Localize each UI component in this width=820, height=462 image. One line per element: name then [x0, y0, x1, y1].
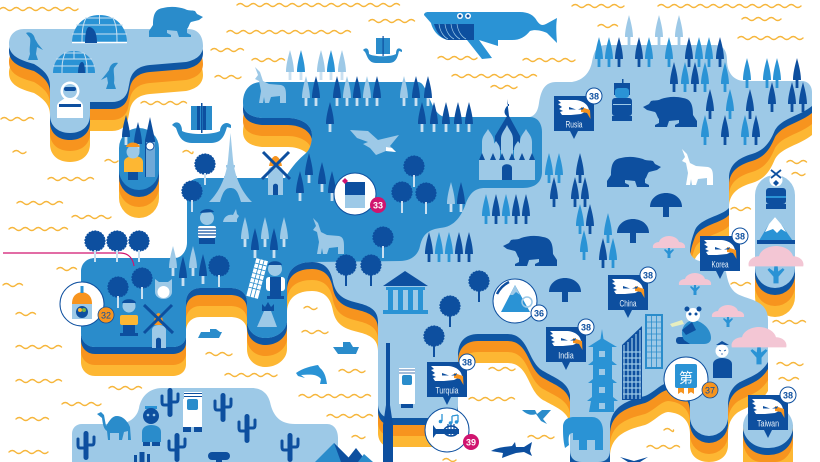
- icon: boat right: [333, 342, 359, 354]
- icon: penguin left: [26, 32, 43, 60]
- icon: japanese man: [766, 170, 786, 209]
- circle icon: stamp 37: 第: [679, 368, 693, 388]
- marker: Korea: [700, 228, 748, 279]
- marker: China: 38: [643, 270, 653, 280]
- forest: europe conifers: [122, 76, 473, 286]
- icon: polar bear: [149, 7, 203, 37]
- icon: rabbit: [223, 209, 239, 222]
- icon: pagoda: [587, 329, 618, 412]
- icon: wolf on europe: [255, 67, 286, 103]
- circle icon: trumpet 39: [425, 408, 479, 452]
- icon: windmill netherlands: [144, 305, 173, 348]
- icon: mount fuji: [757, 217, 795, 244]
- icon: parthenon: [383, 271, 428, 314]
- marker: Korea: Korea: [712, 260, 728, 270]
- circle icon: dome 32: [60, 282, 114, 326]
- circle icon: dome 32: 32: [101, 310, 111, 320]
- icon: british man and big ben: [124, 117, 155, 180]
- forest: mushroom trees: [549, 193, 682, 302]
- forest: round trees on light land: [336, 255, 489, 357]
- circle icon: mountains 36: [493, 279, 547, 323]
- marker: China: China: [620, 298, 636, 308]
- icon: large igloo: [72, 15, 127, 43]
- forest: asia conifers mid blue: [435, 15, 781, 268]
- icon: skyscraper dark: [622, 326, 642, 400]
- forest: pink blossom trees: [653, 236, 803, 364]
- marker: Taiwan: 38: [783, 390, 793, 400]
- icon: dutch man: [120, 299, 138, 336]
- icon: wolf grey on europe south: [313, 218, 344, 254]
- icon: small igloo: [53, 51, 95, 73]
- panel: south china lobe: [690, 398, 728, 436]
- icon: pyramids: [315, 443, 373, 462]
- icon: bear south: [503, 236, 557, 266]
- icon: dolphin: [296, 365, 327, 384]
- panel: taiwan island: [743, 405, 793, 448]
- marker: India: India: [558, 350, 574, 360]
- panel: arctic island: [9, 29, 203, 133]
- marker: India: 38: [581, 322, 591, 332]
- icon: arab man right: [399, 368, 415, 408]
- icon: russian man: [612, 79, 632, 121]
- forest: pale trees above europe: [286, 50, 346, 80]
- icon: panda: [670, 306, 711, 344]
- marker: Taiwan: [748, 387, 796, 438]
- icon: skyscraper blue: [645, 314, 663, 369]
- icon: shark: [491, 442, 532, 458]
- icon: eiffel tower: [209, 133, 252, 202]
- marker: Rusia: 38: [589, 92, 599, 102]
- icon: french man: [198, 209, 216, 244]
- icon: elephant: [563, 417, 603, 450]
- icon: orthodox church: [479, 99, 535, 180]
- icon: penguin right: [101, 63, 118, 89]
- circle icon: trumpet 39: 39: [466, 438, 476, 448]
- forest: round trees on europe: [85, 154, 436, 308]
- icon: italian man: [266, 261, 285, 299]
- circle icon: book 33: 33: [373, 200, 383, 210]
- icon: arab man: [183, 392, 202, 432]
- icon: eskimo person: [57, 82, 83, 118]
- panel: europe land: [81, 82, 542, 347]
- marker: Turquia: Turquia: [436, 386, 458, 396]
- forest: asia conifers dark: [425, 37, 807, 268]
- panel: light blue main land: [81, 45, 812, 433]
- icon: owl: [155, 279, 172, 299]
- desert: cacti: [78, 388, 298, 462]
- circle icon: mountains 36: 36: [534, 308, 544, 318]
- circle icon: stamp 37: 37: [705, 386, 715, 396]
- icon: magenta pointer line: [3, 253, 134, 266]
- marker: India: [546, 319, 594, 370]
- icon: camel: [97, 412, 131, 440]
- icon: burj tower: [383, 343, 393, 462]
- icon: pisa tower: [246, 258, 268, 299]
- circle icon: stamp 37: [664, 357, 718, 401]
- icon: eagle bird: [350, 130, 399, 155]
- marker: Turquia: 38: [462, 358, 472, 368]
- panel: britain island: [119, 128, 159, 190]
- icon: man with turban: [142, 406, 161, 446]
- icon: bear centre: [607, 157, 661, 187]
- marker: Rusia: [554, 88, 602, 139]
- marker: Turquia: [427, 354, 475, 405]
- panel: japan island: [755, 175, 795, 288]
- panel: india peninsula: [570, 420, 610, 462]
- marker: Rusia: Rusia: [566, 120, 582, 130]
- icon: volcano: [257, 302, 277, 327]
- icon: boat left: [198, 329, 222, 338]
- icon: brown bear north: [643, 97, 697, 127]
- icon: bird bottom: [620, 457, 648, 462]
- marker: China: [608, 267, 656, 318]
- icon: kayak bird: [522, 410, 551, 424]
- icon: longship large: [172, 103, 231, 143]
- icon: white wolf: [682, 149, 713, 185]
- icon: windmill france: [262, 152, 290, 195]
- marker: Korea: 38: [735, 232, 745, 242]
- panel: africa land: [72, 388, 338, 462]
- circle icon: book 33: [334, 173, 386, 215]
- icon: whale: [424, 12, 557, 59]
- icon: longship small: [363, 36, 402, 63]
- marker: Taiwan: Taiwan: [757, 418, 779, 428]
- icon: oval tree desert: [208, 452, 230, 462]
- icon: chinese man: [713, 341, 732, 378]
